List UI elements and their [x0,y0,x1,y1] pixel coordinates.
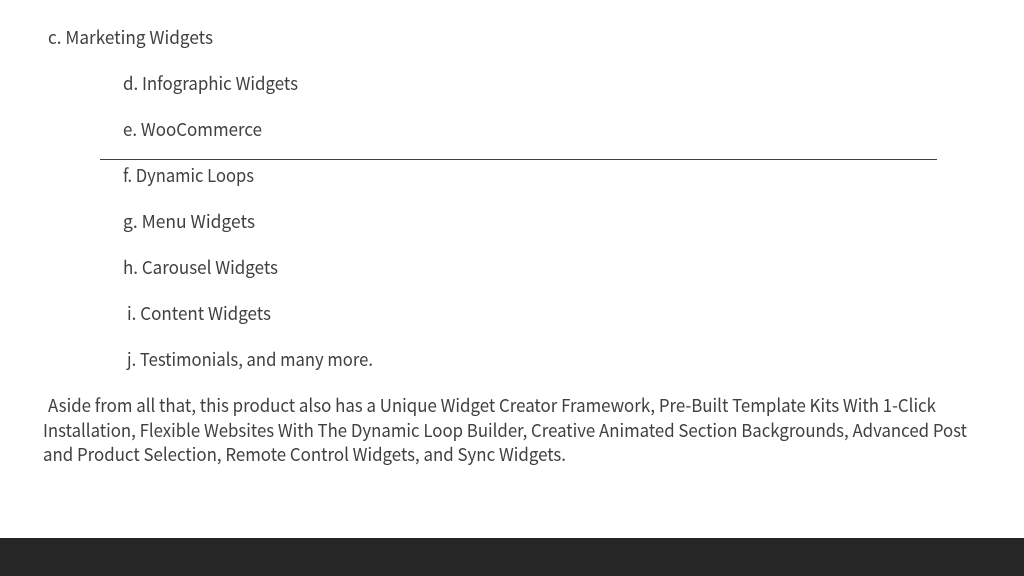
list item j: j. Testimonials, and many more. [126,346,373,372]
footer bar [0,538,1024,576]
horizontal rule [100,159,937,160]
summary paragraph: Installation, Flexible Websites With The Dynamic Loop Builder, Creative Animated Section Backgrounds, Advanced Post [43,417,967,443]
summary paragraph: and Product Selection, Remote Control Widgets, and Sync Widgets. [43,441,566,467]
summary paragraph: Aside from all that, this product also has a Unique Widget Creator Framework, Pre-Built Template Kits With 1-Click [48,392,936,418]
list item d: d. Infographic Widgets [123,70,298,96]
list item g: g. Menu Widgets [123,208,255,234]
list item f: f. Dynamic Loops [123,162,254,188]
list item i: i. Content Widgets [127,300,271,326]
summary paragraph [43,392,967,467]
list item h: h. Carousel Widgets [123,254,278,280]
list item e: e. WooCommerce [123,116,262,142]
list item c: c. Marketing Widgets [48,24,213,50]
widget list [48,24,373,372]
